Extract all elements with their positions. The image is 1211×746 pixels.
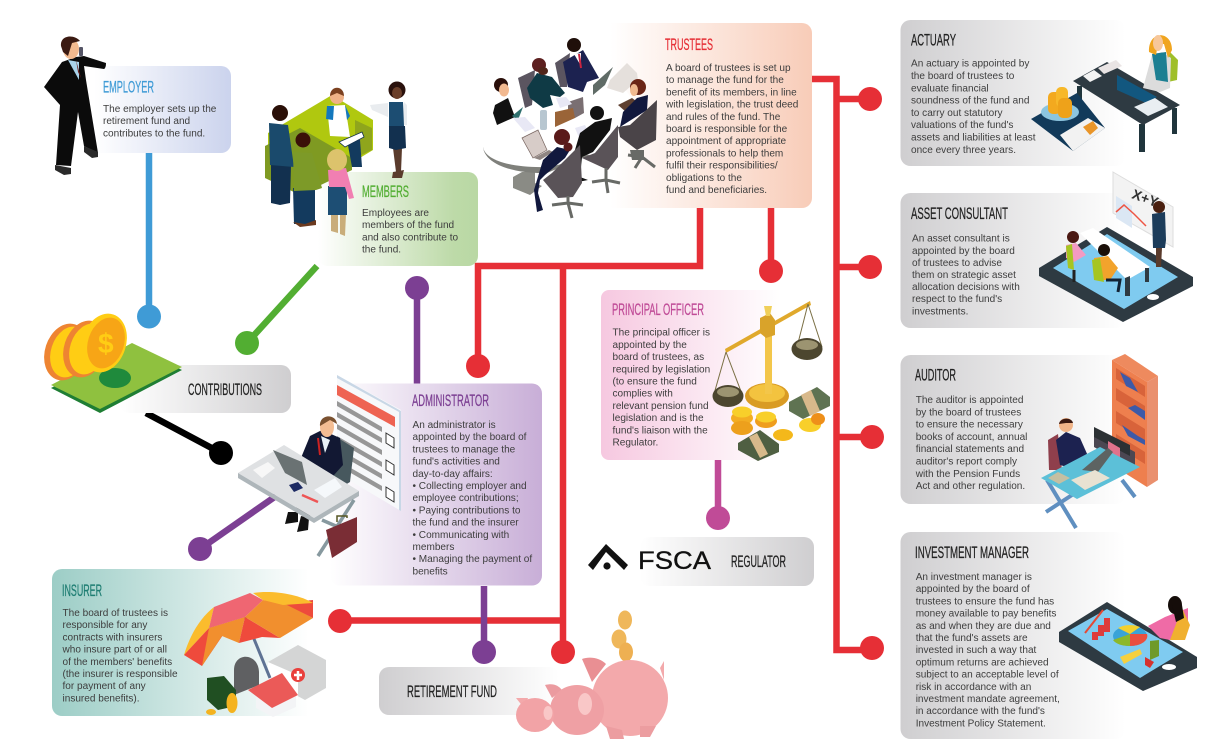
text: investment manager description: subject to an acceptable level of: [916, 670, 1059, 681]
heading: principal officer: PRINCIPAL OFFICER: [612, 301, 704, 319]
trustee: bearded man: [518, 58, 565, 108]
text: members description: and also contribute to: [362, 232, 458, 243]
text: administrator description: benefits: [412, 566, 448, 577]
panel: investment manager: [900, 532, 1126, 739]
text: asset consultant description: them on strategic asset: [912, 270, 1016, 281]
icon: asset consultant tablet classroom: [1039, 172, 1193, 322]
text: principal officer description: Regulator.: [612, 438, 658, 448]
trustee: woman on right: [618, 79, 657, 168]
text: principal officer description: board of trustees, as: [612, 352, 704, 363]
text: investment manager description: appointed by the board of: [916, 584, 1030, 595]
text: principal officer description: complies with: [612, 389, 673, 400]
text: administrator description: employee contributions;: [412, 493, 519, 504]
text: actuary description: the board of trustees to: [911, 71, 1015, 82]
panel: principal officer: [601, 290, 791, 460]
text: trustees description: and rules of the fund. The: [666, 112, 781, 123]
text: insurer description: insured benefits).: [62, 693, 140, 704]
text: administrator description: • Collecting employer and: [412, 481, 527, 492]
text: actuary description: valuations of the fund's: [911, 120, 1013, 131]
text: trustees description: obligations to the: [666, 173, 742, 184]
panel: employer: [87, 66, 231, 153]
heading: members: MEMBERS: [362, 183, 409, 201]
icon: auditor at desk with bookshelf: [1041, 354, 1158, 528]
heading: actuary: ACTUARY: [911, 32, 956, 50]
text: auditor description: Act and other regulation.: [916, 481, 1025, 492]
trustee: woman on left: [493, 78, 523, 125]
logo: FSCA: FSCA: [638, 548, 712, 575]
text: asset consultant description: allocation decisions with: [912, 282, 1020, 293]
heading: retirement fund: RETIREMENT FUND: [407, 683, 497, 701]
text: investment manager description: An investment manager is: [916, 572, 1032, 583]
panel: contributions: [120, 365, 291, 413]
icon: coins and banknotes: $: [98, 328, 114, 359]
text: asset consultant description: An asset consultant is: [912, 234, 1010, 245]
trustee: front woman: [534, 129, 583, 218]
icon: umbrella over house, ambulance, tombstone and cash: [184, 592, 326, 717]
text: principal officer description: fund's liaison with the: [612, 425, 708, 436]
text: principal officer description: (to ensure the fund: [612, 376, 697, 388]
heading: regulator: REGULATOR: [731, 553, 786, 571]
panel: members: [318, 172, 478, 266]
text: administrator description: members: [412, 542, 454, 553]
text: actuary description: once every three years.: [911, 145, 1016, 156]
trustee: top man: [555, 38, 613, 95]
text: administrator description: An administrator is: [412, 420, 496, 431]
text: auditor description: to ensure the necessary: [916, 420, 1023, 431]
text: actuary description: to carry out statutory: [911, 108, 1003, 119]
text: trustees description: fulfil their responsibilities/: [666, 161, 778, 172]
heading: auditor: AUDITOR: [915, 367, 956, 385]
text: trustees description: benefit of its members, in line: [666, 87, 797, 98]
text: insurer description: responsible for any: [62, 620, 147, 631]
text: auditor description: books of account, annual: [916, 432, 1027, 443]
text: auditor description: with the Pension Funds: [915, 469, 1020, 480]
icon: employer on the phone: [44, 37, 106, 175]
text: trustees description: appointment of appropriate: [666, 136, 786, 147]
text: investment manager description: in accordance with the fund's: [916, 706, 1045, 717]
icon: investment manager phone with charts: [1059, 596, 1197, 691]
text: investment manager description: invested in such a way that: [916, 645, 1037, 656]
text: investment manager description: that the fund's assets are: [916, 633, 1028, 644]
text: principal officer description: The principal officer is: [612, 328, 710, 339]
text: actuary description: An actuary is appointed by: [911, 59, 1029, 70]
text: trustees description: to manage the fund for the: [666, 75, 784, 86]
text: administrator description: appointed by the board of: [412, 432, 527, 443]
text: insurer description: who insure part of or all: [62, 645, 167, 656]
text: auditor description: by the board of trustees: [916, 407, 1021, 418]
text: principal officer description: legislation and is the: [612, 413, 704, 424]
text: insurer description: of the members' benefits: [62, 657, 172, 668]
icon: members group on a sofa: [265, 82, 407, 236]
panel: actuary: [900, 20, 1126, 166]
text: employer description: The employer sets up the: [103, 104, 217, 115]
panel: trustees: [588, 23, 812, 208]
text: administrator description: • Managing the payment of: [412, 554, 532, 565]
text: administrator description: day-to-day affairs:: [412, 469, 493, 480]
text: asset consultant description: appointed by the board: [912, 246, 1015, 257]
text: investment manager description: Investment Policy Statement.: [916, 718, 1046, 729]
text: administrator description: trustees to manage the: [412, 444, 516, 455]
text: members description: Employees are: [362, 208, 429, 219]
heading: contributions: CONTRIBUTIONS: [188, 381, 262, 399]
text: asset consultant description: respect to the fund's: [912, 294, 1002, 305]
heading: trustees: TRUSTEES: [665, 36, 713, 54]
text: insurer description: contracts with insurers: [62, 632, 162, 643]
heading: employer: EMPLOYER: [103, 78, 154, 96]
icon: asset consultant tablet classroom: X+Y: [1130, 186, 1161, 210]
text: investment manager description: trustees to ensure the fund has: [916, 596, 1054, 607]
text: actuary description: assets and liabilities at least: [911, 132, 1036, 144]
text: investment manager description: optimum returns are achieved: [916, 657, 1049, 668]
heading: insurer: INSURER: [62, 582, 102, 600]
text: members description: members of the fund: [362, 220, 454, 231]
text: members description: the fund.: [362, 245, 401, 256]
text: employer description: retirement fund and: [103, 116, 190, 127]
panel: auditor: [900, 355, 1126, 504]
text: investment manager description: investment mandate agreement,: [916, 694, 1060, 705]
connector lines: [146, 79, 870, 652]
text: actuary description: soundness of the fund and: [911, 96, 1029, 107]
text: principal officer description: required by legislation: [612, 364, 710, 375]
panel: administrator: [330, 384, 542, 586]
text: administrator description: fund's activities and: [412, 457, 500, 468]
icon: three piggy banks and falling coins: [516, 610, 668, 739]
connector end dots: [137, 87, 884, 664]
text: investment manager description: money available to pay benefits: [916, 609, 1056, 620]
text: insurer description: for payment of any: [62, 681, 146, 692]
text: trustees description: with legislation, the trust deed: [665, 100, 798, 111]
text: auditor description: auditor's report comply: [916, 456, 1017, 468]
heading: investment manager: INVESTMENT MANAGER: [915, 544, 1029, 562]
text: trustees description: board is responsible for the: [666, 124, 788, 135]
icon: gold scale with coins and cash: [712, 301, 830, 461]
panel: regulator: [588, 537, 814, 586]
panel: asset consultant: [900, 193, 1126, 328]
heading: asset consultant: ASSET CONSULTANT: [911, 205, 1008, 223]
text: asset consultant description: of trustees to advise: [912, 258, 1002, 269]
trustee: front man: [572, 106, 620, 193]
text: insurer description: (the insurer is responsible: [62, 669, 178, 680]
icon: coins and banknotes: [37, 308, 182, 413]
text: trustees description: fund and beneficiaries.: [666, 185, 767, 196]
text: asset consultant description: investments.: [912, 306, 968, 317]
text: trustees description: A board of trustees is set up: [666, 63, 791, 74]
text: actuary description: evaluate financial: [911, 83, 989, 94]
panel: insurer: [52, 569, 322, 716]
panel: retirement fund: [379, 667, 559, 715]
text: investment manager description: risk in accordance with an: [916, 682, 1031, 693]
text: auditor description: financial statements and: [916, 444, 1024, 455]
text: administrator description: • Paying contributions to: [412, 505, 521, 516]
text: auditor description: The auditor is appointed: [916, 395, 1024, 406]
icon: actuary at desk with coin scale: [1031, 35, 1180, 152]
text: principal officer description: relevant pension fund: [612, 401, 709, 412]
text: insurer description: The board of trustees is: [62, 608, 168, 619]
text: employer description: contributes to the fund.: [103, 128, 205, 139]
text: investment manager description: as and when they are due and: [916, 621, 1051, 632]
heading: administrator: ADMINISTRATOR: [412, 392, 489, 410]
text: administrator description: • Communicating with: [412, 530, 509, 541]
icon: administrator at desk with checklist: [238, 375, 401, 558]
text: trustees description: professionals to help them: [666, 148, 783, 159]
logo: FSCA: [588, 544, 712, 575]
text: administrator description: the fund and the insurer: [412, 518, 519, 529]
icon: trustees at a board table: [483, 38, 657, 218]
text: principal officer description: appointed by the: [612, 340, 687, 351]
